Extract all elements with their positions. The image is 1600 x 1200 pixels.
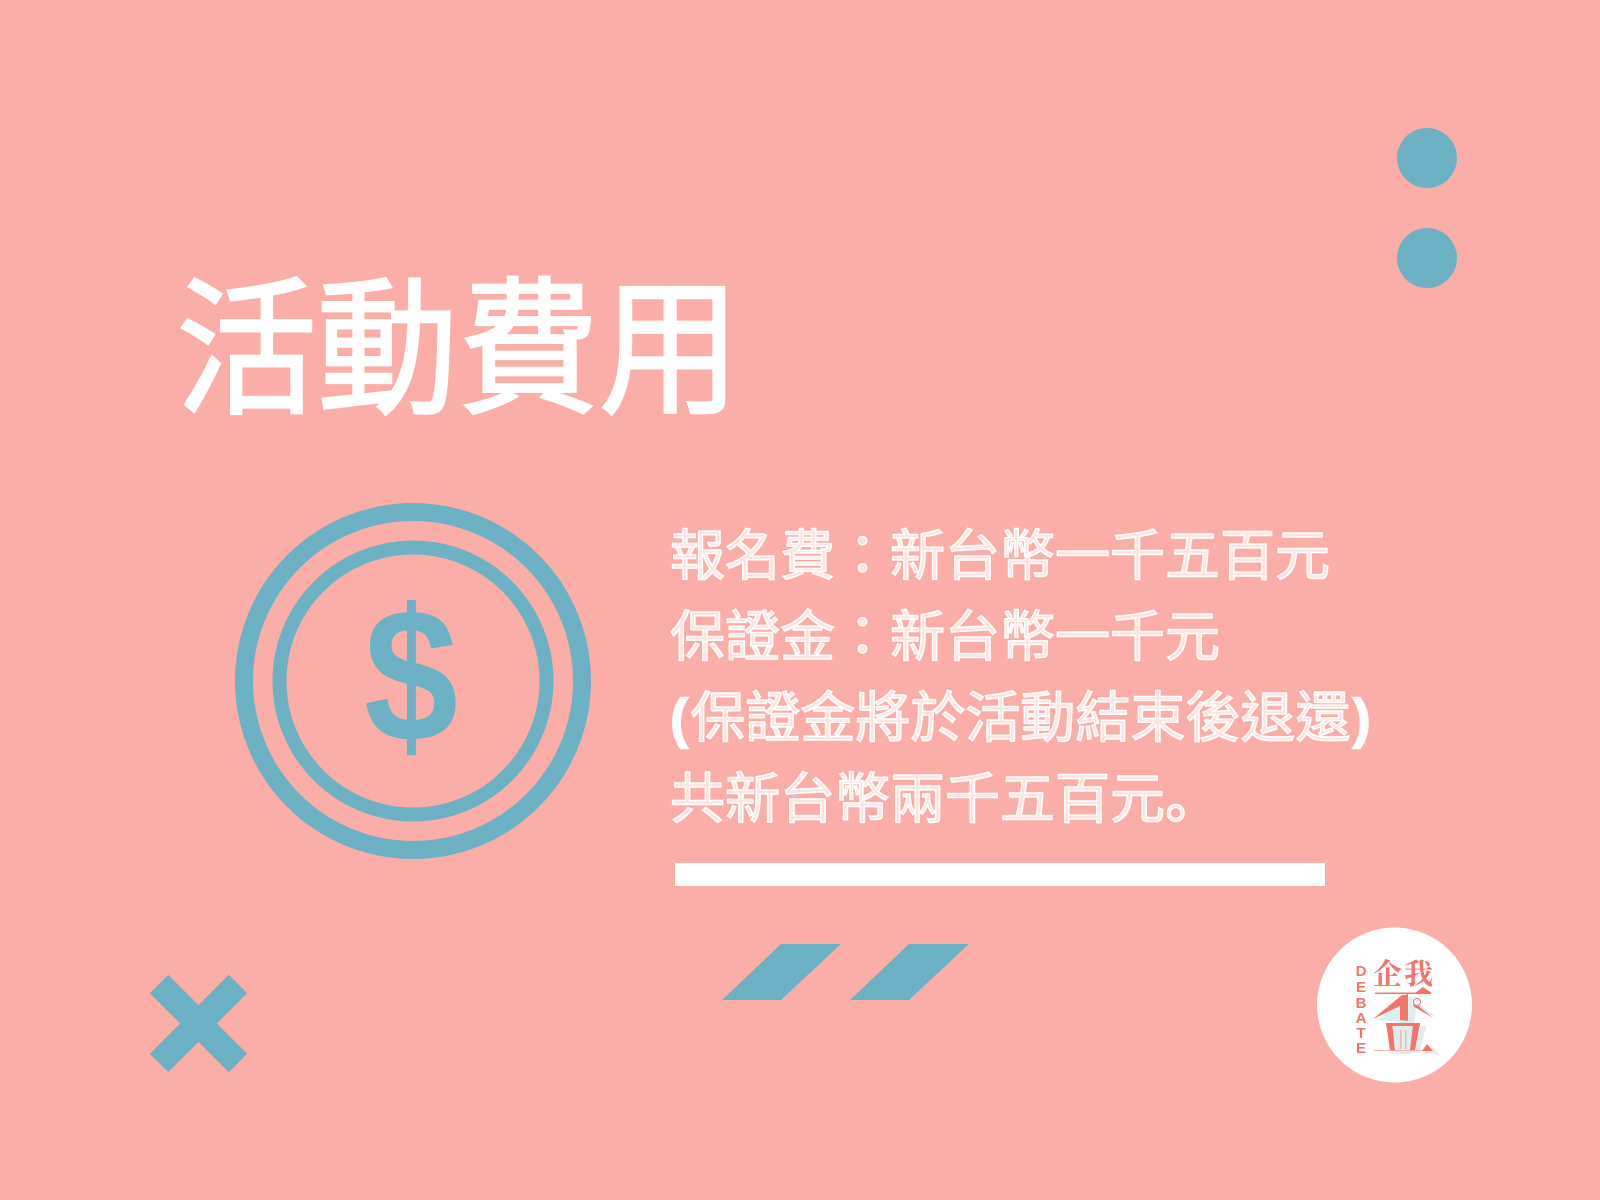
fee details text: (保證金將於活動結束後退還) bbox=[670, 687, 1371, 749]
logo side label: E bbox=[1356, 1040, 1366, 1057]
icon: teal cross bbox=[159, 984, 238, 1063]
fee details text bbox=[670, 525, 1371, 830]
fee details text: 保證金：新台幣一千元 bbox=[670, 606, 1220, 668]
logo badge bbox=[1317, 928, 1472, 1082]
logo house mark bbox=[1373, 987, 1433, 1051]
icon: dollar coin bbox=[244, 512, 582, 850]
white divider bar bbox=[675, 863, 1325, 886]
fee details text: 共新台幣兩千五百元。 bbox=[670, 768, 1220, 830]
decorative teal dots bbox=[1397, 128, 1457, 288]
logo side label: A bbox=[1356, 1010, 1367, 1027]
logo side label: B bbox=[1356, 995, 1367, 1012]
logo side label: D bbox=[1356, 963, 1367, 980]
logo text: 企 bbox=[1373, 958, 1402, 991]
logo shadow shapes bbox=[1378, 996, 1439, 1054]
logo side label: E bbox=[1356, 979, 1366, 996]
decorative teal slashes bbox=[722, 944, 969, 1000]
icon: dollar coin: $ bbox=[364, 570, 458, 782]
fee details text: 報名費：新台幣一千五百元 bbox=[670, 525, 1330, 587]
logo side label: T bbox=[1356, 1025, 1366, 1042]
title: 活動費用 bbox=[176, 267, 740, 434]
logo badge: 我 bbox=[1404, 958, 1433, 991]
